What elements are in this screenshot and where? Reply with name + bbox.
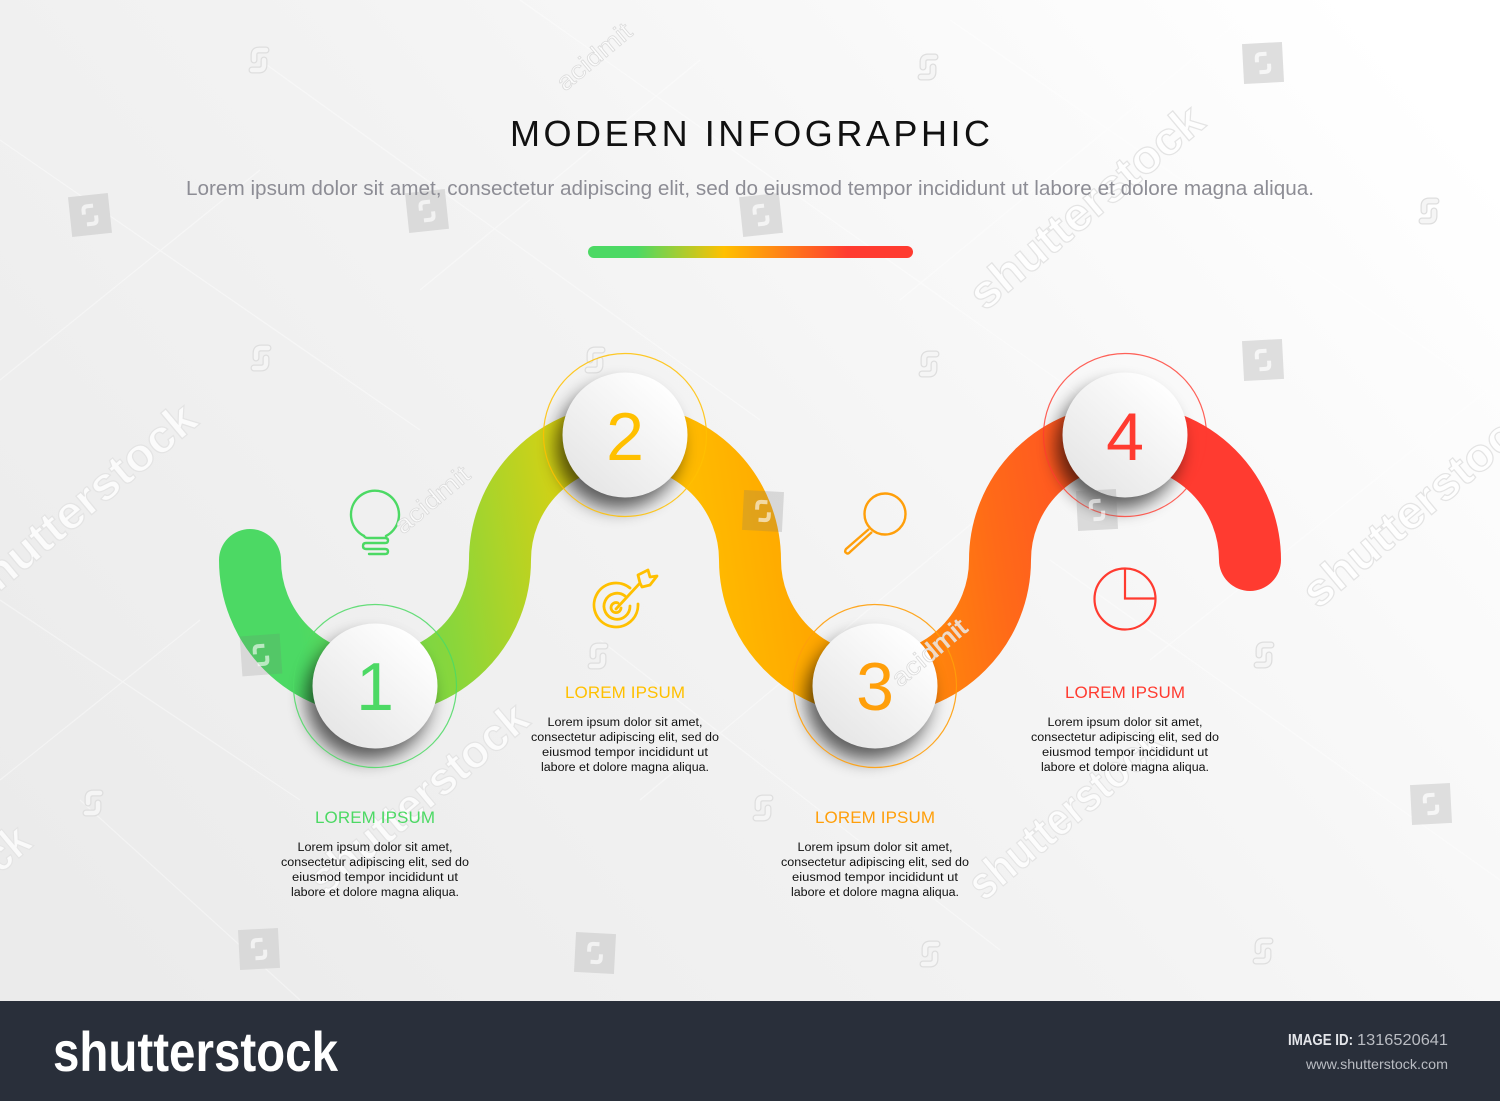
step 1 node bbox=[294, 604, 456, 768]
text block: step 2: Lorem ipsum dolor sit amet, bbox=[548, 717, 702, 729]
watermark: gray stamps bbox=[68, 42, 1452, 974]
watermark: stamps over ribbon bbox=[240, 490, 784, 676]
text block: step 4: consectetur adipiscing elit, sed do bbox=[1031, 732, 1219, 744]
text block: step 3: labore et dolore magna aliqua. bbox=[791, 887, 959, 899]
text block: step 3: eiusmod tempor incididunt ut bbox=[792, 872, 959, 884]
text block: step 1: Lorem ipsum dolor sit amet, bbox=[298, 842, 452, 854]
text block: step 2: consectetur adipiscing elit, sed do bbox=[531, 732, 719, 744]
watermark: acidmit text: acidmit bbox=[886, 613, 973, 693]
icon: magnifier bbox=[845, 494, 906, 554]
text block: step 3: LOREM IPSUM bbox=[815, 808, 935, 827]
footer image id: www.shutterstock.com bbox=[1305, 1056, 1448, 1072]
gradient divider bbox=[588, 246, 913, 258]
text block: step 4: labore et dolore magna aliqua. bbox=[1041, 762, 1209, 774]
subtitle: Lorem ipsum dolor sit amet, consectetur adipiscing elit, sed do eiusmod tempor incididunt ut labore et dolore magna aliqua. bbox=[186, 178, 1314, 200]
step 4 node: 4 bbox=[1106, 399, 1144, 475]
step 2 node: 2 bbox=[606, 399, 644, 475]
title: MODERN INFOGRAPHIC bbox=[510, 113, 990, 154]
text block: step 4: eiusmod tempor incididunt ut bbox=[1042, 747, 1209, 759]
footer bar bbox=[0, 1001, 1500, 1101]
step 1 node: 1 bbox=[356, 649, 394, 725]
text block: step 4 bbox=[1031, 683, 1219, 774]
text block: step 3: Lorem ipsum dolor sit amet, bbox=[798, 842, 952, 854]
text block: step 2: LOREM IPSUM bbox=[565, 683, 685, 702]
watermark: shutterstock text: shutterstock bbox=[298, 691, 539, 905]
icon: target bbox=[594, 570, 657, 627]
watermark: acidmit text bbox=[389, 17, 973, 693]
text block: step 1: LOREM IPSUM bbox=[315, 808, 435, 827]
watermark: acidmit text: acidmit bbox=[551, 17, 638, 97]
wave ribbon bbox=[250, 435, 1250, 685]
watermark: outline marks bbox=[86, 50, 1436, 964]
watermark: acidmit text: acidmit bbox=[389, 460, 476, 540]
footer image id: 1316520641 bbox=[1357, 1032, 1448, 1049]
step 3 node: 3 bbox=[856, 649, 894, 725]
watermark: stamp over step 4 bbox=[1076, 489, 1118, 531]
footer logo: shutterstock bbox=[53, 1020, 339, 1083]
text block: step 1 bbox=[281, 808, 469, 899]
text block: step 1: eiusmod tempor incididunt ut bbox=[292, 872, 459, 884]
footer image id bbox=[1288, 1032, 1448, 1072]
step 4 node bbox=[1044, 354, 1206, 516]
text block: step 2: eiusmod tempor incididunt ut bbox=[542, 747, 709, 759]
footer image id: IMAGE ID: bbox=[1288, 1032, 1353, 1049]
watermark: shutterstock text: shutterstock bbox=[957, 715, 1175, 910]
text block: step 1: labore et dolore magna aliqua. bbox=[291, 887, 459, 899]
text block: step 4: LOREM IPSUM bbox=[1065, 683, 1185, 702]
step 2 node bbox=[544, 354, 706, 516]
watermark: shutterstock text: shutterstock bbox=[958, 93, 1214, 320]
icon: pie chart bbox=[1094, 568, 1156, 630]
text block: step 2 bbox=[531, 683, 719, 774]
step 3 node bbox=[794, 604, 956, 768]
text block: step 3: consectetur adipiscing elit, sed do bbox=[781, 857, 969, 869]
text block: step 3 bbox=[781, 808, 969, 899]
text block: step 4: Lorem ipsum dolor sit amet, bbox=[1048, 717, 1202, 729]
text block: step 2: labore et dolore magna aliqua. bbox=[541, 762, 709, 774]
text block: step 1: consectetur adipiscing elit, sed do bbox=[281, 857, 469, 869]
icon: light bulb bbox=[351, 491, 399, 554]
